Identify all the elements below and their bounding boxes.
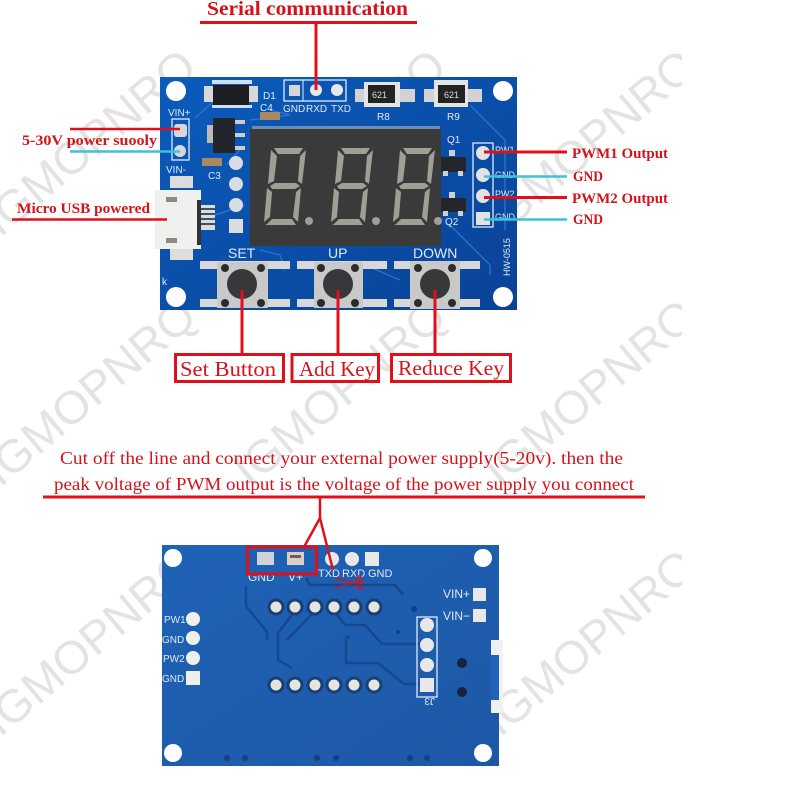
callout: GND 2: GND xyxy=(573,212,603,228)
panel: front of PWM board xyxy=(155,77,517,310)
callout: GND 1: GND xyxy=(573,169,603,185)
output pads xyxy=(473,143,493,227)
silkscreen labels: PW1 xyxy=(164,615,186,626)
callout: add key xyxy=(292,290,378,382)
silkscreen labels: PW2 xyxy=(495,189,515,199)
mounting holes xyxy=(166,81,513,307)
7-segment display xyxy=(250,126,442,246)
header: serial pads xyxy=(284,80,346,101)
callout: GND 2 xyxy=(484,212,603,228)
silkscreen labels: VIN+ xyxy=(168,108,191,119)
watermark pattern: IGMOPNRQ xyxy=(223,39,456,246)
silkscreen labels: R9 xyxy=(447,112,460,123)
callout: PWM1 output: PWM1 Output xyxy=(572,146,668,162)
silkscreen labels: HW-0515 xyxy=(502,238,512,276)
instruction text xyxy=(43,448,645,497)
silkscreen labels: UP xyxy=(328,245,347,261)
J3 header xyxy=(417,617,437,697)
silkscreen labels: RXD xyxy=(342,568,365,580)
silkscreen labels: RXD xyxy=(306,104,327,115)
button DOWN xyxy=(394,261,480,309)
silkscreen labels: R8 xyxy=(377,112,390,123)
USB tabs xyxy=(491,640,503,713)
callout: add key: Add Key xyxy=(299,357,375,381)
vias along bottom edge xyxy=(224,606,430,761)
diode D1 xyxy=(204,80,258,108)
watermark pattern: IGMOPNRQ xyxy=(473,539,706,746)
silkscreen labels: Q1 xyxy=(447,135,461,146)
red highlight box and pointer xyxy=(248,497,333,574)
black vias xyxy=(457,658,467,697)
callout: GND 1 xyxy=(484,169,603,185)
instruction text: peak voltage of PWM output is the voltage of the power supply you connect xyxy=(54,474,634,494)
watermark pattern xyxy=(0,39,706,746)
silkscreen labels: J3 xyxy=(424,695,435,706)
watermark pattern: IGMOPNRQ xyxy=(473,39,706,246)
button UP xyxy=(297,262,387,308)
silkscreen labels: GND xyxy=(368,568,392,580)
silkscreen labels: C3 xyxy=(208,171,221,182)
voltage regulator xyxy=(202,112,280,166)
watermark pattern: IGMOPNRQ xyxy=(473,289,706,496)
circuit traces xyxy=(246,578,420,684)
digit 2 xyxy=(331,148,380,225)
panel: back of PWM board xyxy=(162,545,503,766)
silkscreen labels: V+ xyxy=(288,570,303,584)
left pins xyxy=(186,612,200,685)
top pads xyxy=(257,552,379,566)
resistors R8 and R9 xyxy=(355,80,482,107)
silkscreen labels: VIN- xyxy=(166,165,186,176)
callout: PWM2 output: PWM2 Output xyxy=(572,191,668,207)
instruction text: Cut off the line and connect your external power supply(5-20v). then the xyxy=(60,448,623,469)
callout: set button: Set Button xyxy=(180,357,277,381)
silkscreen labels: TXD xyxy=(331,104,351,115)
resistors R8 and R9: 621 xyxy=(444,90,459,100)
silkscreen labels: GND xyxy=(283,104,305,115)
silkscreen labels: PW2 xyxy=(163,654,185,665)
VIN pads xyxy=(473,588,486,622)
silkscreen labels: C4 xyxy=(260,103,273,114)
callout: power supply: 5-30V power suooly xyxy=(22,133,158,149)
silkscreen labels: GND xyxy=(162,674,184,685)
watermark pattern: IGMOPNRQ xyxy=(223,289,456,496)
watermark pattern: IGMOPNRQ xyxy=(223,539,456,746)
silkscreen labels: DOWN xyxy=(413,245,457,261)
callout: reduce key: Reduce Key xyxy=(398,356,504,380)
silkscreen labels xyxy=(162,91,516,288)
silkscreen labels xyxy=(162,568,470,706)
mounting holes xyxy=(164,549,492,762)
silkscreen labels: D1 xyxy=(263,91,276,102)
icon: scissors cut mark xyxy=(335,576,363,589)
callout: micro USB: Micro USB powered xyxy=(17,201,151,217)
transistors Q1 and Q2 xyxy=(441,150,466,216)
side pads xyxy=(229,156,243,233)
VIN terminals xyxy=(172,119,189,160)
silkscreen labels: k xyxy=(162,277,168,288)
silkscreen labels: Q2 xyxy=(445,217,459,228)
button SET xyxy=(200,262,290,308)
silkscreen labels: VIN− xyxy=(443,609,470,623)
digit 1 xyxy=(264,148,313,225)
silkscreen labels: VIN+ xyxy=(443,587,470,601)
micro USB connector xyxy=(155,176,215,260)
silkscreen labels: GND xyxy=(162,635,184,646)
silkscreen labels: PW1 xyxy=(495,145,515,155)
silkscreen labels: GND xyxy=(248,570,275,584)
callout: set button xyxy=(176,290,284,382)
callout: reduce key xyxy=(392,290,510,382)
silkscreen labels: SET xyxy=(228,245,256,261)
silkscreen labels: TXD xyxy=(318,568,340,580)
silkscreen labels: GND xyxy=(495,212,516,222)
header pin rows xyxy=(269,600,381,692)
silkscreen labels: GND xyxy=(495,170,516,180)
digit 3 xyxy=(393,148,442,225)
resistors R8 and R9: 621 xyxy=(372,90,387,100)
